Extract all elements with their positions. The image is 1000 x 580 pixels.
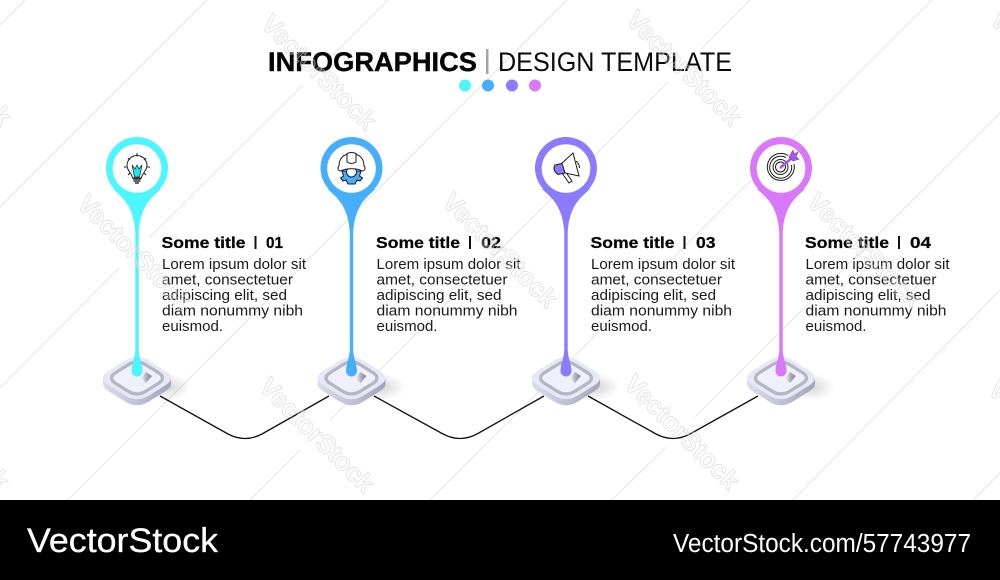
text: step 1: Some title [162,235,246,252]
watermarks: VectorStock [801,186,929,314]
text: step 4: Lorem ipsum dolor sit [806,257,950,273]
text: step 4 [805,235,950,335]
text: step 3: Lorem ipsum dolor sit [591,257,735,273]
footer logo text: VectorStock [27,522,219,560]
text: step 2: Lorem ipsum dolor sit [376,257,521,273]
text: step 4: 04 [910,235,931,252]
platform 2 [318,357,406,405]
text: step 4: diam nonummy nibh [806,304,946,320]
title [268,47,732,77]
text: step 3: 03 [696,235,716,252]
text: step 1: 01 [266,235,283,252]
text: step 3: euismod. [591,319,652,335]
text: step 3: adipiscing elit, sed [591,288,716,304]
step 2 [318,137,521,405]
footer url text: VectorStock.com/57743977 [673,530,971,558]
step 1 [103,137,306,405]
connector lines [160,396,758,438]
text: step 3: diam nonummy nibh [591,304,732,320]
icon: target with dart [767,150,799,180]
platform 3 [532,357,620,405]
text: step 3: Some title [590,235,675,252]
icon: light bulb [124,153,150,183]
watermarks: VectorStock [71,188,199,316]
text: step 2: 02 [481,235,501,252]
text: step 3 [590,235,735,335]
text: step 1: diam nonummy nibh [162,304,303,320]
text: step 4: adipiscing elit, sed [806,288,930,304]
pin 4 [750,137,812,376]
text: step 4: amet, consectetuer [806,272,937,288]
text: step 2: adipiscing elit, sed [376,288,502,304]
title colour dots [459,80,541,92]
text: step 1: amet, consectetuer [162,272,293,288]
text: step 2: euismod. [376,319,438,335]
watermarks: VectorStock [620,4,748,132]
step 3 [532,137,735,405]
icon: hard hat with gear [338,152,365,184]
watermarks: VectorStock [255,8,383,136]
text: step 4: euismod. [806,319,866,335]
platform 1 [103,357,191,405]
step 4 [747,137,950,405]
text: step 1: euismod. [162,319,223,335]
icon: megaphone [554,153,580,183]
text: step 4: Some title [805,235,889,252]
text: step 1: Lorem ipsum dolor sit [162,257,306,273]
text: step 3: amet, consectetuer [591,272,722,288]
platform 4 [747,357,835,405]
text: step 1: adipiscing elit, sed [162,288,287,304]
text: step 1 [162,235,306,335]
watermarks: VectorStock [436,186,564,314]
title: DESIGN TEMPLATE [498,47,732,77]
text: step 2: diam nonummy nibh [376,304,518,320]
title: INFOGRAPHICS [268,47,477,77]
text: step 2: amet, consectetuer [376,272,508,288]
text: step 2: Some title [376,235,460,252]
footer bar [0,500,1000,580]
watermarks: VectorStock [618,368,746,496]
pin 2 [320,137,382,376]
watermarks: VectorStock [253,371,381,499]
pin 1 [106,137,168,376]
pin 3 [535,137,597,376]
text: step 2 [376,235,521,335]
